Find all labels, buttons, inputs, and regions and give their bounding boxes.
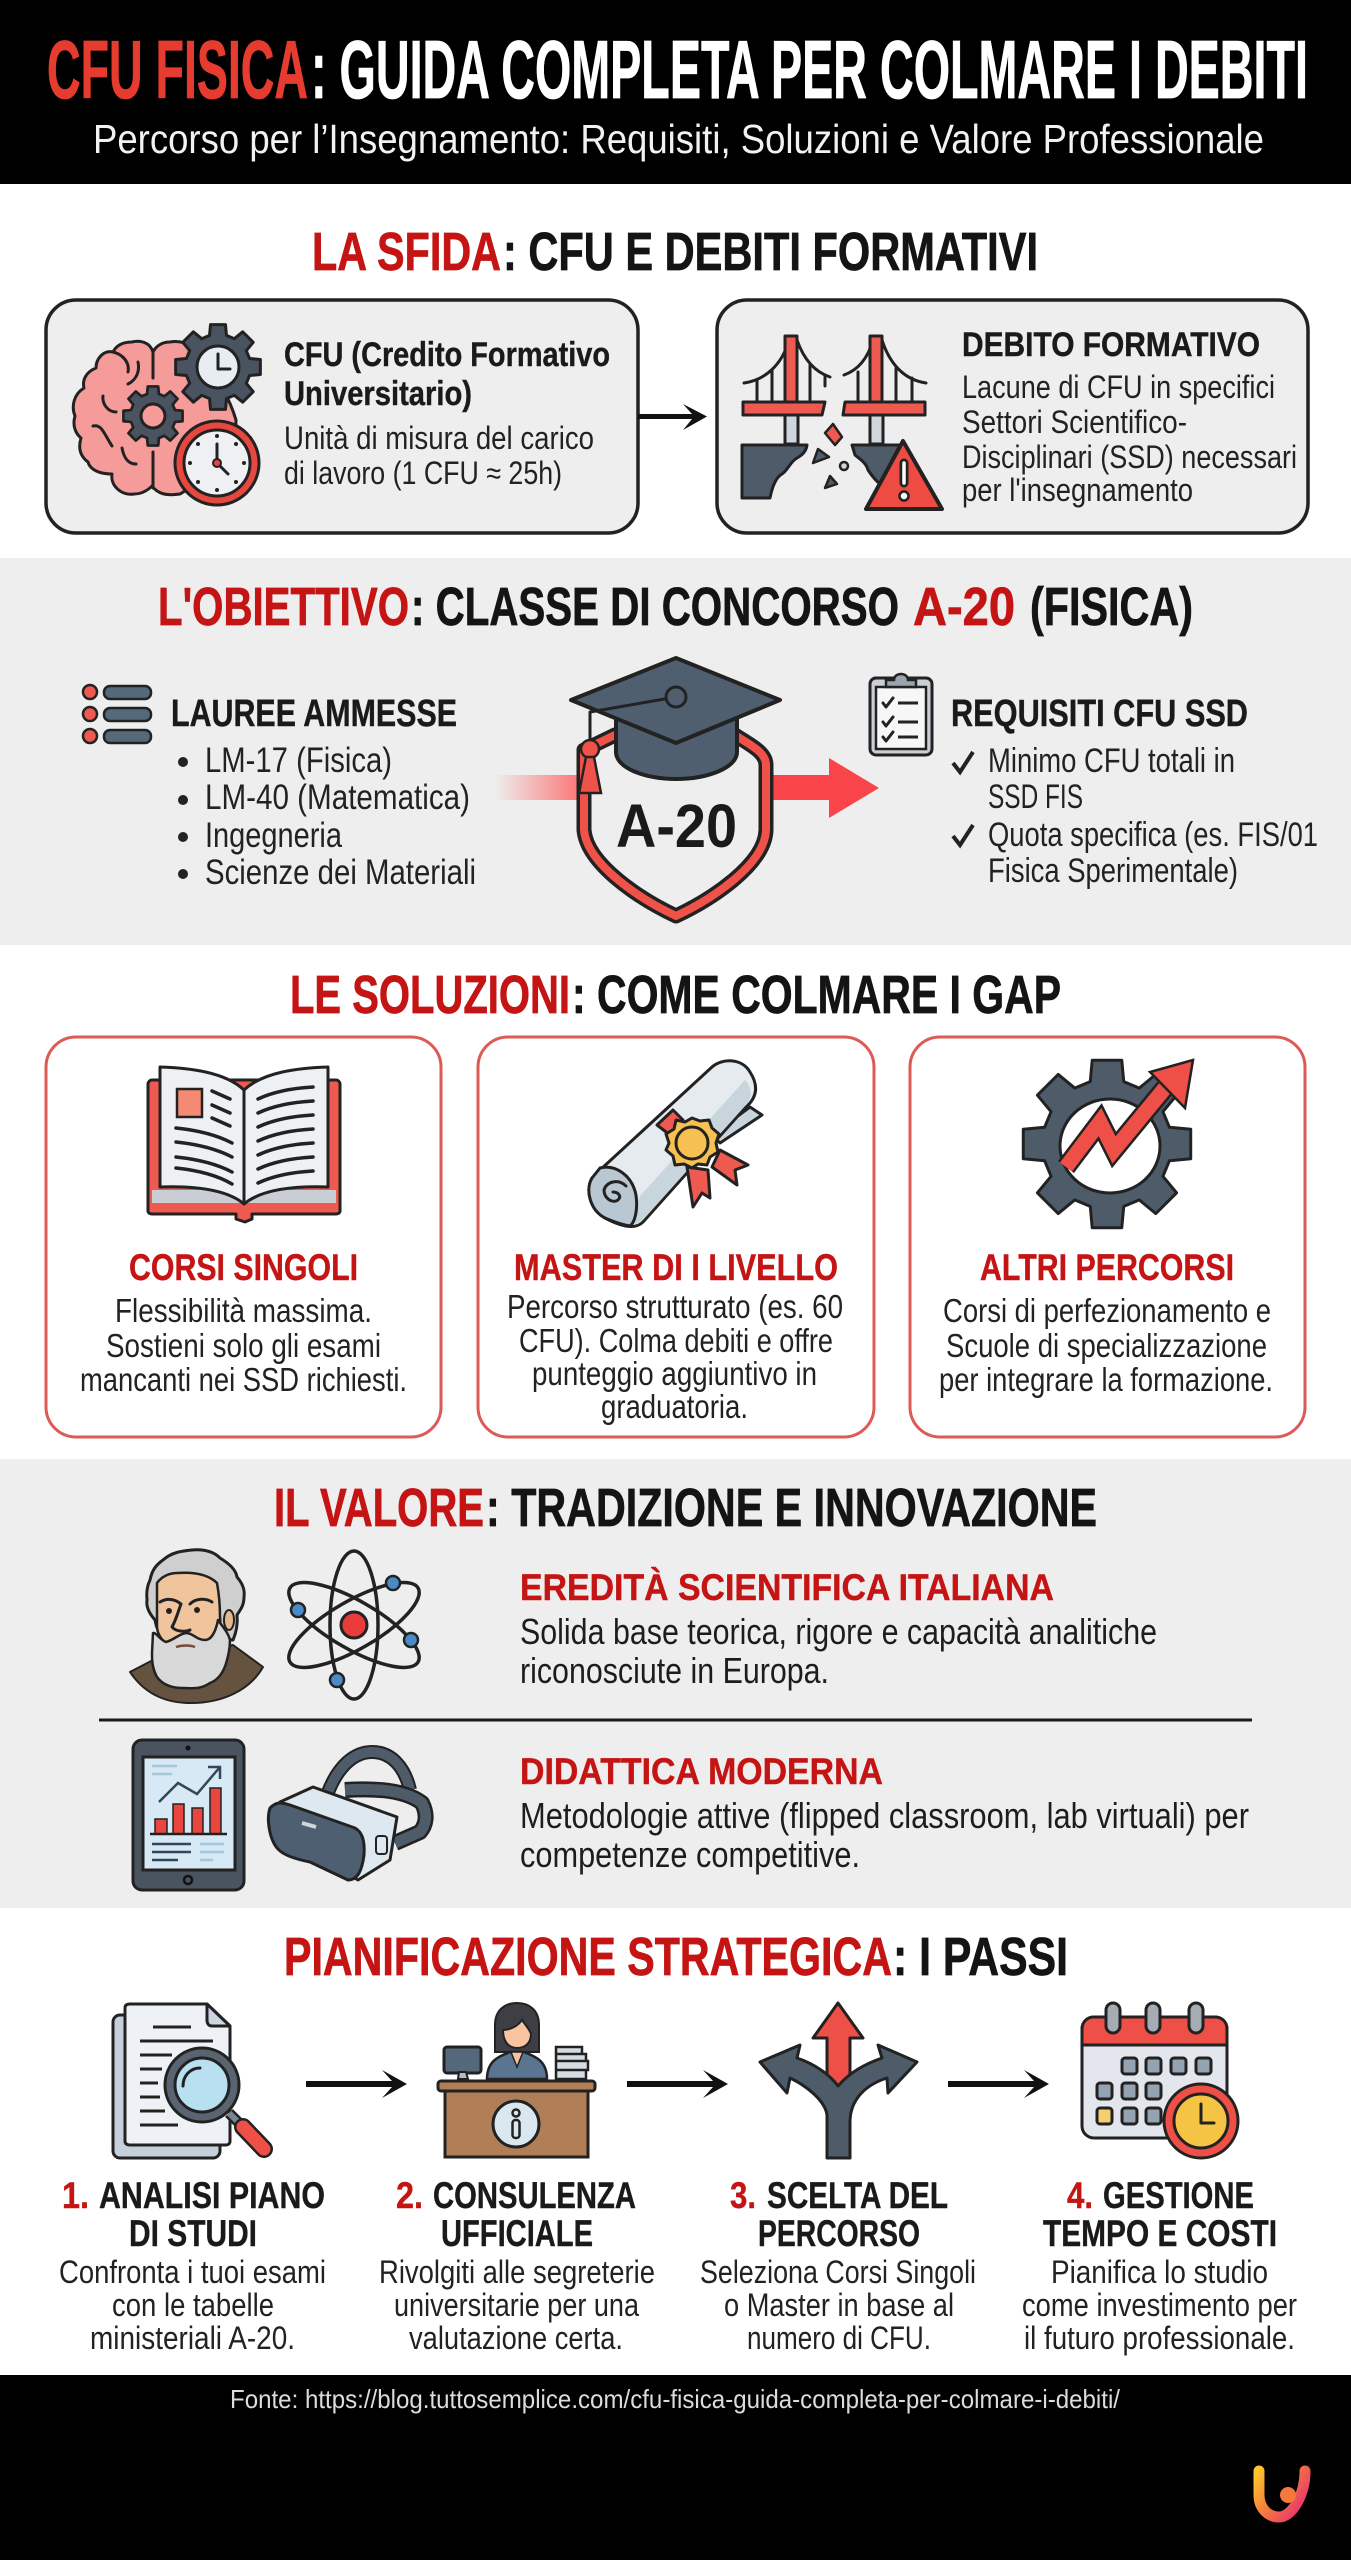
step 1: DI STUDI	[129, 2213, 257, 2254]
heading: la sfida: : CFU E DEBITI FORMATIVI	[503, 222, 1038, 282]
text: didattica moderna	[520, 1751, 1249, 1875]
block: lauree ammesse: Scienze dei Materiali	[205, 853, 476, 892]
clock	[175, 421, 259, 505]
block: requisiti CFU SSD	[951, 693, 1318, 890]
icon: crossroads arrows	[760, 2003, 917, 2158]
card: master	[478, 1037, 874, 1437]
heading: pianificazione: : I PASSI	[893, 1927, 1068, 1987]
heading: le soluzioni: : COME COLMARE I GAP	[572, 965, 1061, 1025]
arrow	[638, 404, 707, 430]
heading: le soluzioni: LE SOLUZIONI	[290, 965, 570, 1025]
title: CFU FISICA	[47, 23, 308, 116]
text: altri percorsi: ALTRI PERCORSI	[980, 1247, 1234, 1288]
text: master: graduatoria.	[601, 1388, 748, 1425]
panel: le soluzioni	[0, 945, 1351, 1459]
icon: open book	[148, 1067, 340, 1222]
icon: atom	[278, 1551, 430, 1699]
block: lauree ammesse: LM-17 (Fisica)	[205, 741, 392, 780]
text: eredità scientifica italiana: Solida base teorica, rigore e capacità analitiche	[520, 1611, 1157, 1652]
step 4: GESTIONE	[1103, 2175, 1254, 2216]
step 4	[1022, 2175, 1297, 2356]
panel: la sfida	[0, 184, 1351, 558]
header band	[0, 0, 1351, 184]
card: debito formativo	[717, 300, 1308, 533]
block: lauree ammesse: LM-40 (Matematica)	[205, 778, 470, 817]
heading: pianificazione: PIANIFICAZIONE STRATEGICA	[284, 1927, 892, 1987]
icon: brain with gears and clock	[73, 325, 260, 505]
text: didattica moderna: competenze competitive.	[520, 1834, 860, 1875]
step 2: CONSULENZA	[433, 2175, 636, 2216]
heading: il valore: : TRADIZIONE E INNOVAZIONE	[486, 1478, 1097, 1538]
card: CFU	[46, 300, 638, 533]
text: CFU: CFU (Credito Formativo	[284, 336, 610, 374]
panel: il valore	[0, 1459, 1351, 1908]
text: debito formativo: Disciplinari (SSD) necessari	[962, 439, 1297, 475]
text: master: Percorso strutturato (es. 60	[507, 1288, 843, 1325]
step 2: 2.	[396, 2175, 423, 2216]
card: corsi singoli	[46, 1037, 441, 1437]
text: master: CFU). Colma debiti e offre	[519, 1322, 833, 1359]
text: debito formativo: DEBITO FORMATIVO	[962, 326, 1260, 364]
icon: A-20 shield with graduation cap	[571, 658, 780, 916]
step 1: 1.	[62, 2175, 89, 2216]
footer band	[0, 2375, 1351, 2560]
text: debito formativo: Settori Scientifico-	[962, 404, 1187, 440]
text: master	[507, 1247, 843, 1425]
text: CFU: di lavoro (1 CFU ≈ 25h)	[284, 455, 562, 491]
text: corsi singoli	[80, 1247, 407, 1398]
heading: l'obiettivo: A-20	[913, 577, 1015, 637]
step 3: PERCORSO	[758, 2213, 920, 2254]
icon: document with magnifier	[113, 2004, 264, 2158]
gear: small	[123, 386, 183, 446]
step 2: Rivolgiti alle segreterie	[379, 2254, 655, 2290]
step 1: ANALISI PIANO	[99, 2175, 325, 2216]
step 3: SCELTA DEL	[767, 2175, 948, 2216]
icon: VR headset	[268, 1752, 426, 1880]
block: lauree ammesse	[171, 693, 476, 892]
step 1: con le tabelle	[112, 2287, 274, 2323]
step 3: numero di CFU.	[747, 2320, 931, 2356]
heading: le soluzioni	[290, 965, 1061, 1025]
text: CFU	[284, 336, 610, 491]
block: requisiti CFU SSD: Fisica Sperimentale)	[988, 852, 1238, 890]
icon: gear with red arrow	[1023, 1060, 1193, 1228]
logo	[1259, 2471, 1305, 2517]
step 2: valutazione certa.	[409, 2320, 623, 2356]
block: requisiti CFU SSD: SSD FIS	[988, 778, 1083, 816]
step 1: Confronta i tuoi esami	[59, 2254, 326, 2290]
heading: l'obiettivo	[158, 577, 1193, 637]
text: debito formativo: Lacune di CFU in specifici	[962, 369, 1275, 405]
panel: pianificazione strategica	[0, 1908, 1351, 2375]
heading: la sfida: LA SFIDA	[312, 222, 501, 282]
heading: l'obiettivo: (FISICA)	[1030, 577, 1193, 637]
icon: diploma scroll	[589, 1061, 762, 1226]
icon: list	[83, 685, 151, 743]
card: altri percorsi	[910, 1037, 1305, 1437]
icon: clipboard	[870, 674, 932, 755]
step 1	[59, 2175, 326, 2356]
text: corsi singoli: mancanti nei SSD richiesti.	[80, 1361, 407, 1398]
block: lauree ammesse: LAUREE AMMESSE	[171, 693, 457, 735]
step 4: TEMPO E COSTI	[1043, 2213, 1277, 2254]
heading: la sfida	[312, 222, 1038, 282]
text: altri percorsi	[939, 1247, 1273, 1398]
text: didattica moderna: Metodologie attive (flipped classroom, lab virtuali) per	[520, 1795, 1249, 1836]
source line: Fonte: https://blog.tuttosemplice.com/cfu-fisica-guida-completa-per-colmare-i-debiti/	[230, 2384, 1121, 2414]
text: altri percorsi: Scuole di specializzazione	[946, 1327, 1267, 1364]
step 4: come investimento per	[1022, 2287, 1297, 2323]
arrow	[306, 2070, 407, 2098]
icon: Galileo portrait	[130, 1550, 263, 1703]
step 3: o Master in base al	[724, 2287, 954, 2323]
heading: il valore	[274, 1478, 1097, 1538]
step 3: 3.	[730, 2175, 756, 2216]
text: eredità scientifica italiana: EREDITÀ SCIENTIFICA ITALIANA	[520, 1567, 1054, 1608]
block: requisiti CFU SSD: Minimo CFU totali in	[988, 742, 1235, 780]
text: altri percorsi: per integrare la formazione.	[939, 1361, 1273, 1398]
text: corsi singoli: CORSI SINGOLI	[129, 1247, 358, 1288]
text: corsi singoli: Flessibilità massima.	[115, 1292, 372, 1329]
arrow	[948, 2070, 1049, 2098]
step 1: ministeriali A-20.	[90, 2320, 295, 2356]
arrow	[627, 2070, 728, 2098]
icon: warning triangle	[866, 441, 942, 509]
text: master: MASTER DI I LIVELLO	[514, 1247, 838, 1288]
text: CFU: Unità di misura del carico	[284, 420, 594, 456]
block: lauree ammesse: Ingegneria	[205, 816, 342, 855]
text: eredità scientifica italiana: riconosciute in Europa.	[520, 1650, 829, 1691]
arrow: red through shield	[495, 758, 879, 818]
step 4: Pianifica lo studio	[1051, 2254, 1268, 2290]
text: CFU: Universitario)	[284, 375, 472, 413]
text: corsi singoli: Sostieni solo gli esami	[106, 1327, 381, 1364]
text: A-20: A-20	[616, 792, 737, 860]
icon: calendar with clock	[1082, 2003, 1238, 2158]
panel: l'obiettivo	[0, 558, 1351, 945]
step 4: 4.	[1067, 2175, 1093, 2216]
heading: l'obiettivo: L'OBIETTIVO	[158, 577, 409, 637]
icon: broken bridge	[742, 336, 942, 509]
block: requisiti CFU SSD: REQUISITI CFU SSD	[951, 693, 1248, 735]
icon: help desk with clerk	[438, 2003, 595, 2157]
step 3	[700, 2175, 976, 2356]
gear: upper	[176, 325, 260, 409]
icon: tablet with chart	[133, 1740, 244, 1890]
text: altri percorsi: Corsi di perfezionamento e	[943, 1292, 1271, 1329]
text: debito formativo	[962, 326, 1297, 508]
step 2	[379, 2175, 655, 2356]
step 3: Seleziona Corsi Singoli	[700, 2254, 976, 2290]
heading: il valore: IL VALORE	[274, 1478, 484, 1538]
text: didattica moderna: DIDATTICA MODERNA	[520, 1751, 883, 1792]
step 2: universitarie per una	[394, 2287, 639, 2323]
text: debito formativo: per l'insegnamento	[962, 472, 1193, 508]
text: eredità scientifica italiana	[520, 1567, 1157, 1691]
text: master: punteggio aggiuntivo in	[532, 1355, 817, 1392]
step 2: UFFICIALE	[441, 2213, 593, 2254]
heading: l'obiettivo: : CLASSE DI CONCORSO	[411, 577, 899, 637]
step 4: il futuro professionale.	[1024, 2320, 1295, 2356]
